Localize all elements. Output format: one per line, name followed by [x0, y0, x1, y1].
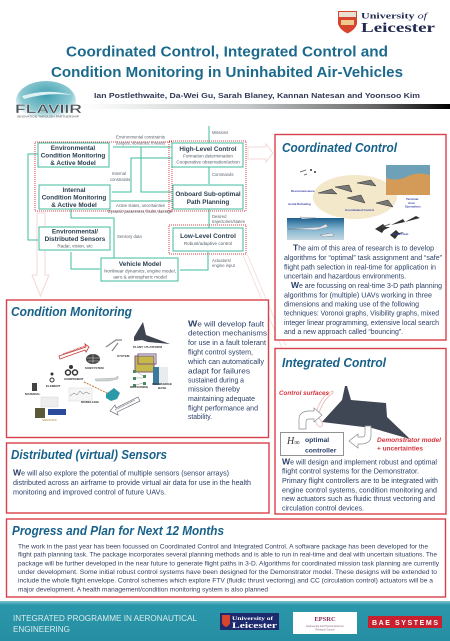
diagram signal labels: Actuators/ [212, 258, 232, 263]
illustration: health monitoring hierarchy: BASE [158, 386, 166, 390]
heading: Progress and Plan for Next 12 Months [12, 523, 224, 538]
H-infinity controller box: controller [305, 448, 337, 454]
illustration: UAV formation scenarios [287, 165, 430, 240]
diagram signal labels: Missions [212, 130, 228, 135]
dotted group: planning [169, 141, 246, 211]
label: control surfaces: Control surfaces [279, 390, 329, 397]
body text: adapt for failures [188, 368, 251, 375]
illustration: health monitoring hierarchy: SENSORS [42, 418, 57, 422]
illustration: health monitoring hierarchy: COMPONENT [64, 377, 84, 381]
heading: Distributed (virtual) Sensors [11, 447, 167, 462]
body text [187, 318, 268, 421]
box: environmental condition monitoring: Condition Monitoring [41, 152, 105, 160]
label: demonstrator model: Demonstrator model [377, 438, 441, 444]
body text: We will develop fault [188, 318, 264, 328]
control surfaces highlight [316, 391, 333, 427]
body text: Primary flight controllers are to be integrated with [282, 478, 438, 485]
H-infinity controller box [280, 432, 344, 456]
box: environmental condition monitoring [38, 143, 109, 167]
panel: condition monitoring [6, 300, 268, 438]
box: vehicle model: Vehicle Model [119, 261, 161, 268]
illustration: demonstrator aircraft [322, 386, 410, 439]
diagram signal labels: Environmental constraints [116, 134, 165, 140]
box: distributed sensors: Environmental/ [52, 228, 98, 236]
illustration: health monitoring hierarchy: MATERIAL [25, 392, 40, 396]
dotted group: low level [169, 225, 246, 254]
body text: The work in the past year has been focussed on Coordinated Control and Integrated Control. A software package has been developed for the [18, 543, 429, 550]
illustration: UAV formation scenarios: Mixed Fleet [392, 232, 408, 236]
footer logo: EPSRC [293, 612, 357, 634]
arrow: control to aircraft [299, 408, 322, 429]
body text [284, 242, 443, 336]
illustration: health monitoring hierarchy: SUBSYSTEM [85, 366, 104, 370]
illustration: UAV formation scenarios: Operations [405, 204, 421, 208]
diagram signal labels: Dynamic parameters, faults, damage [108, 209, 173, 214]
box: high-level control: High-Level Control [179, 146, 237, 153]
body text [13, 468, 251, 496]
body text: distributed across an airframe to provide virtual air data for use in the health [13, 480, 251, 487]
body text: flight control system, [188, 350, 253, 357]
illustration: health monitoring hierarchy: REASONING [130, 385, 149, 389]
body text: which can automatically [187, 359, 264, 366]
box: high-level control [172, 143, 243, 167]
panel: progress and plan [6, 519, 446, 597]
body text: maintaining adequate [188, 396, 255, 403]
FLAVIIR logo: FLAVIIR [15, 102, 82, 116]
box: low-level control [173, 228, 243, 251]
box: internal condition monitoring [39, 185, 110, 209]
H-infinity controller box: H [287, 436, 294, 447]
footer band [0, 601, 450, 641]
diagram signal labels [108, 130, 245, 268]
box: onboard sub-optimal path planning: Path Planning [187, 199, 229, 206]
body text: for use in a fault tolerant [188, 340, 266, 347]
control system block diagram [28, 126, 246, 281]
illustration: health monitoring hierarchy [25, 322, 172, 422]
illustration: health monitoring hierarchy: PLANT / PLATFORM [133, 345, 162, 349]
title [51, 44, 403, 81]
arrow: aircraft to controller [349, 426, 371, 448]
body text: engine control systems, condition monitoring and [282, 487, 437, 494]
heading: Condition Monitoring [11, 304, 132, 319]
body text: algorithms for “optimal” task assignment and “safe” [284, 255, 443, 262]
body text: We will also explore the potential of multiple sensors (sensor arrays) [13, 468, 229, 478]
programme name: ENGINEERING [13, 625, 70, 634]
box: onboard sub-optimal path planning: Onboard Sub-optimal [175, 191, 241, 198]
label: demonstrator model [377, 438, 441, 452]
H-infinity controller box: ∞ [294, 438, 300, 447]
box: environmental condition monitoring: & Active Model [50, 160, 96, 167]
footer logo: EPSRC: Engineering and Physical Sciences [306, 625, 344, 628]
body text: mission thereby [188, 387, 241, 394]
illustration: UAV formation scenarios: Coordinated Control [345, 208, 374, 212]
body text: The aim of this area of research is to develop [293, 242, 434, 252]
diagram signal labels: Internal [112, 171, 126, 176]
body text: under development. Some initial robust control systems have been designed for the Demonstrator model. These designs will be extended to [18, 569, 438, 576]
body text: flight control systems for the Demonstrator. [282, 469, 419, 476]
box: high-level control: Cooperative observation/action [176, 160, 240, 164]
body text: major development. A health management/condition monitoring system is also planned [18, 586, 269, 593]
footer logo: BAE Systems: BAE SYSTEMS [372, 620, 438, 627]
body text: flight path planning task. The package incorporates several planning methods and is able to run in real-time and deal with uncertain situations. The [18, 552, 438, 559]
box: distributed sensors: Distributed Sensors [45, 236, 106, 243]
University of Leicester logo [338, 10, 435, 36]
programme name [13, 614, 198, 634]
body text: dimensions and making use of the following [284, 302, 419, 309]
diagram connectors [28, 126, 209, 270]
body text: sustained during a [188, 378, 244, 385]
box: low-level control: Low-Level Control [180, 233, 236, 240]
body text [18, 543, 440, 593]
diagram signal labels: Commands [212, 172, 233, 177]
footer logo: University of Leicester: Leicester [232, 620, 277, 630]
body text: flight path selection in real-time for application in [284, 264, 436, 271]
box: onboard sub-optimal path planning [173, 185, 243, 209]
FLAVIIR logo: INNOVATION THROUGH PARTNERSHIP [17, 116, 79, 118]
body text: package will be further developed in the near future to generate flight paths in 3-D. Algorithms for coordinated mission task planning are currently [18, 560, 440, 567]
body text: integer linear programming, extensive local search [284, 320, 439, 327]
body text [282, 456, 438, 512]
arrow: diagram to condition monitoring [32, 213, 49, 296]
H-infinity controller box: optimal [305, 437, 329, 444]
body text: monitoring and improved control of future UAVs. [13, 489, 166, 496]
arrow: diagram to integrated control [243, 254, 286, 348]
diagram signal labels: (targets, obstacles, threats) [116, 140, 166, 146]
body text: and a new approach called “bouncing”. [284, 329, 403, 336]
illustration: UAV formation scenarios: Aerial Refueling [288, 202, 311, 206]
box: low-level control: Robust/adaptive control [184, 241, 232, 246]
diagram signal labels: trajectories/states [212, 219, 245, 224]
body text: detection mechanisms [188, 331, 268, 338]
illustration: health monitoring hierarchy: MODELLING [81, 400, 100, 404]
illustration: health monitoring hierarchy: ELEMENT [46, 384, 61, 388]
body text: We are focussing on real-time 3-D path planning [291, 280, 442, 290]
panel: integrated control [275, 348, 446, 514]
body text: circulation control devices. [282, 505, 364, 512]
diagram signal labels: engine input [212, 263, 236, 268]
arrow: diagram to coordinated control [248, 144, 273, 162]
label: demonstrator model: + uncertainties [377, 446, 424, 452]
illustration: health monitoring hierarchy: KNOWLEDGE [152, 382, 172, 386]
box: vehicle model: Nonlinear dynamics, engine model, [104, 268, 176, 274]
FLAVIIR logo [15, 81, 82, 121]
diagram signal labels: constraints [110, 177, 130, 182]
box: environmental condition monitoring: Environmental [51, 145, 95, 152]
dotted group: condition models [35, 142, 172, 211]
body text: uncertain and hazardous environments. [284, 273, 406, 280]
footer logo: EPSRC: EPSRC [314, 616, 336, 623]
panel: coordinated control [275, 134, 446, 340]
body text: new actuators such as fluidic thrust vectoring and [282, 496, 435, 503]
authors: Ian Postlethwaite, Da-Wei Gu, Sarah Blaney, Kannan Natesan and Yoonsoo Kim [94, 91, 420, 100]
diagram signal labels: Desired [212, 214, 227, 219]
box: vehicle model [101, 258, 178, 281]
box: high-level control: Formation determination [183, 154, 233, 158]
heading: Integrated Control [282, 355, 386, 370]
box: internal condition monitoring: & Active Model [51, 202, 97, 209]
body text: include the whole flight envelope. Control schemes which explore FTV (fluidic thrust vectoring) and CC (circulation control) actuators will be a [18, 578, 434, 585]
box: distributed sensors: Radar, vision, etc [57, 244, 93, 248]
body text: stability. [188, 414, 212, 421]
programme name: INTEGRATED PROGRAMME IN AERONAUTICAL [13, 614, 198, 623]
University of Leicester logo: University of [361, 10, 429, 20]
body text: We will design and implement robust and optimal [282, 456, 437, 466]
footer logo: EPSRC: Research Council [316, 628, 335, 632]
illustration: UAV formation scenarios: Reconnaissance [291, 189, 315, 193]
illustration: UAV formation scenarios: Area [408, 201, 415, 205]
header gradient rule [82, 104, 450, 109]
box: distributed sensors [39, 227, 110, 250]
body text: flight performance and [188, 405, 258, 412]
footer logo: BAE Systems [368, 616, 442, 628]
diagram signal labels: Active states, uncertainties [116, 203, 165, 208]
footer logo: University of Leicester: University of [232, 617, 273, 622]
footer logo: University of Leicester [220, 613, 279, 630]
diagram signal labels: Sensory data [117, 234, 142, 239]
body text: techniques: Voronoi graphs, Visibility graphs, mixed [284, 311, 439, 318]
heading: Coordinated Control [282, 140, 397, 155]
body text: algorithms for (multiple) UAVs working in three [284, 292, 432, 299]
illustration: UAV formation scenarios: Terminal [406, 197, 418, 201]
title: Condition Monitoring in Uninhabited Air-Vehicles [51, 65, 403, 81]
box: internal condition monitoring: Condition Monitoring [42, 194, 106, 202]
box: internal condition monitoring: Internal [62, 187, 86, 194]
title: Coordinated Control, Integrated Control and [66, 44, 388, 60]
panel: distributed (virtual) sensors [6, 443, 269, 513]
box: vehicle model: aero & atmospheric model [113, 274, 167, 280]
University of Leicester logo: Leicester [361, 21, 435, 36]
illustration: health monitoring hierarchy: SYSTEM [117, 354, 130, 358]
